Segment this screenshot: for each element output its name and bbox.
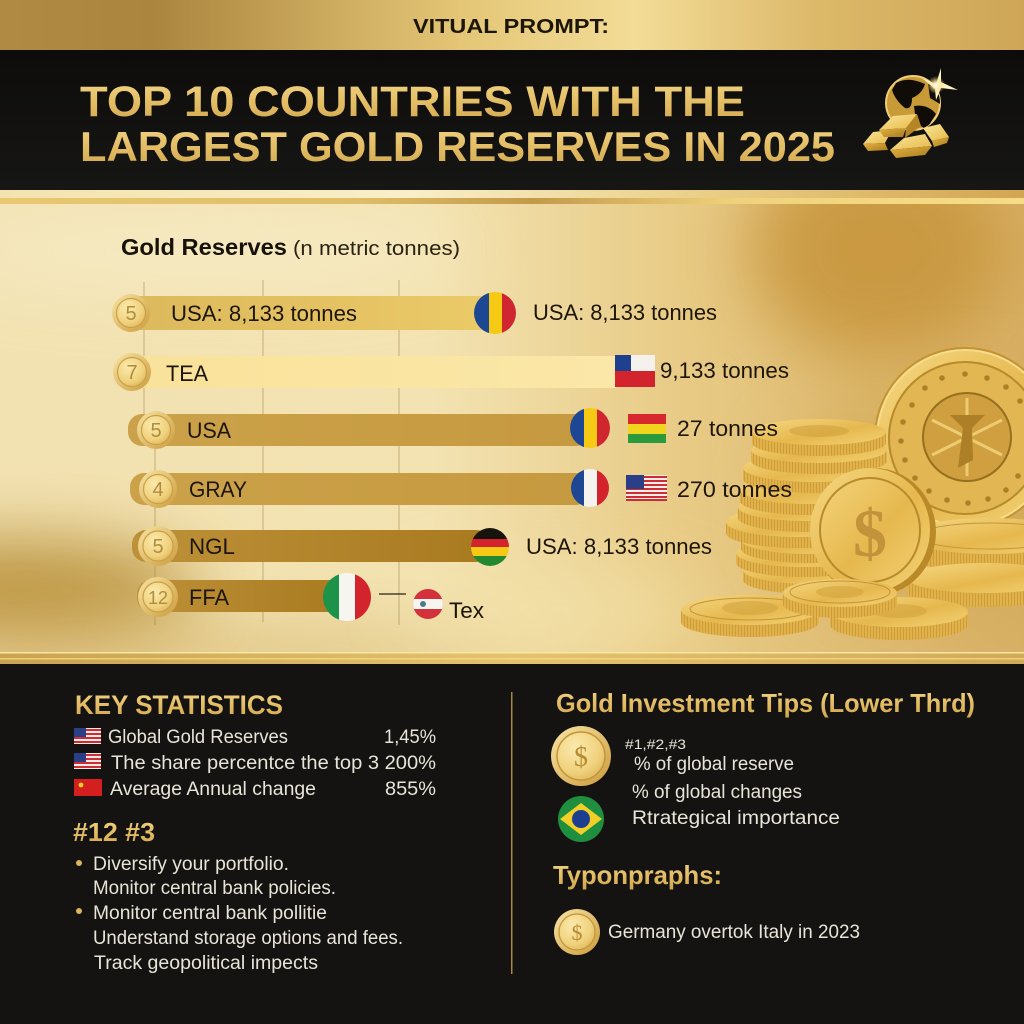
statistic: global gold reserves: 1,45% xyxy=(384,727,436,748)
bar row 1: USA: 8,133 tonnes xyxy=(533,300,717,325)
bar row 2: 9,133 tonnes xyxy=(660,358,789,383)
icon: small gold coin xyxy=(554,909,600,955)
bar row 5: USA: 8,133 tonnes xyxy=(526,534,712,559)
top banner xyxy=(0,0,1024,50)
title xyxy=(80,78,835,170)
bar row 1: 5 xyxy=(125,303,137,325)
top banner: VITUAL PROMPT: xyxy=(413,16,609,38)
text block: tip lines: #1,#2,#3 xyxy=(625,736,686,752)
bar row 2: TEA xyxy=(166,361,208,386)
icon: brazil flag xyxy=(558,796,604,842)
icon: small gold coin: $ xyxy=(572,920,582,945)
chart heading: Gold Reserves xyxy=(121,234,287,260)
heading: gold investment tips: Gold Investment Tips (Lower Thrd) xyxy=(556,688,975,718)
text block: tip lines: % of global changes xyxy=(632,782,802,803)
text: germany note: Germany overtok Italy in 2023 xyxy=(608,922,860,943)
heading: tips list: #12 #3 xyxy=(73,817,155,847)
dollar coin xyxy=(810,468,936,596)
bullet list: Monitor central bank pollitie xyxy=(93,903,327,924)
gold strip upper xyxy=(0,190,1024,204)
bar row 5 xyxy=(132,526,712,568)
big shield coin xyxy=(874,347,1024,529)
chart heading: (n metric tonnes) xyxy=(293,238,460,260)
bullet list: Understand storage options and fees. xyxy=(93,928,403,949)
icon: gold coin xyxy=(551,726,611,786)
flat coins xyxy=(681,579,968,640)
title: TOP 10 COUNTRIES WITH THE xyxy=(80,78,745,126)
icon: gold coin: $ xyxy=(574,742,588,773)
text block: tip lines: Rtrategical importance xyxy=(632,808,840,829)
statistic: average annual change xyxy=(74,779,436,800)
bar row 6 xyxy=(137,573,484,623)
right coin stack xyxy=(905,518,1024,607)
bar row 6: 12 xyxy=(148,588,168,608)
bar row 1: USA: 8,133 tonnes xyxy=(171,301,357,326)
statistic: global gold reserves: Global Gold Reserves xyxy=(108,727,288,748)
statistic: average annual change: Average Annual change xyxy=(110,779,316,800)
panel: key statistics xyxy=(74,690,436,800)
bar row 2 xyxy=(113,353,789,391)
chart heading xyxy=(121,234,460,260)
header panel xyxy=(0,50,1024,190)
panel: tips list xyxy=(73,817,403,974)
bar row 6: FFA xyxy=(189,585,229,610)
dollar coin: $ xyxy=(853,495,887,571)
gold strip lower xyxy=(0,652,1024,664)
panel: bottom dark section xyxy=(0,664,1024,1024)
statistic: share of the top 3: The share percentce the top 3 200% xyxy=(111,753,436,774)
bullet list xyxy=(76,854,403,974)
bar row 4 xyxy=(130,469,667,508)
bar row 6: Tex xyxy=(449,598,484,623)
bar row 3: 5 xyxy=(150,420,162,442)
text block: tip lines: % of global reserve xyxy=(634,754,794,775)
illustration: gold coin stacks xyxy=(681,347,1024,640)
heading: typonpraphs: Typonpraphs: xyxy=(553,860,722,890)
bar row 3 xyxy=(128,408,666,449)
overlapping value labels xyxy=(677,416,792,502)
bullet list: Monitor central bank policies. xyxy=(93,878,336,899)
overlapping value labels: 27 tonnes xyxy=(677,416,778,441)
bar row 5: 5 xyxy=(152,536,164,558)
heading: key statistics: KEY STATISTICS xyxy=(75,690,283,720)
statistic: average annual change: 855% xyxy=(385,779,436,800)
bar row 4: 4 xyxy=(152,479,164,501)
icon: globe and gold bars xyxy=(863,68,958,158)
title: LARGEST GOLD RESERVES IN 2025 xyxy=(80,123,835,170)
overlapping value labels: 270 tonnes xyxy=(677,477,792,502)
statistic: global gold reserves xyxy=(74,727,436,748)
bullet list: Diversify your portfolio. xyxy=(93,854,289,875)
bar row 4: GRAY xyxy=(189,477,247,502)
panel: gold investment tips xyxy=(551,688,975,955)
bar row 3: USA xyxy=(187,418,231,443)
bullet list: Track geopolitical impects xyxy=(94,953,318,974)
text block: tip lines xyxy=(625,736,840,829)
left coin stack xyxy=(726,419,887,594)
panel: bar chart background xyxy=(0,204,1024,652)
bar row 1 xyxy=(112,292,717,334)
bar row 5: NGL xyxy=(189,534,235,559)
chart grid lines xyxy=(144,280,399,625)
bar row 2: 7 xyxy=(126,362,138,384)
